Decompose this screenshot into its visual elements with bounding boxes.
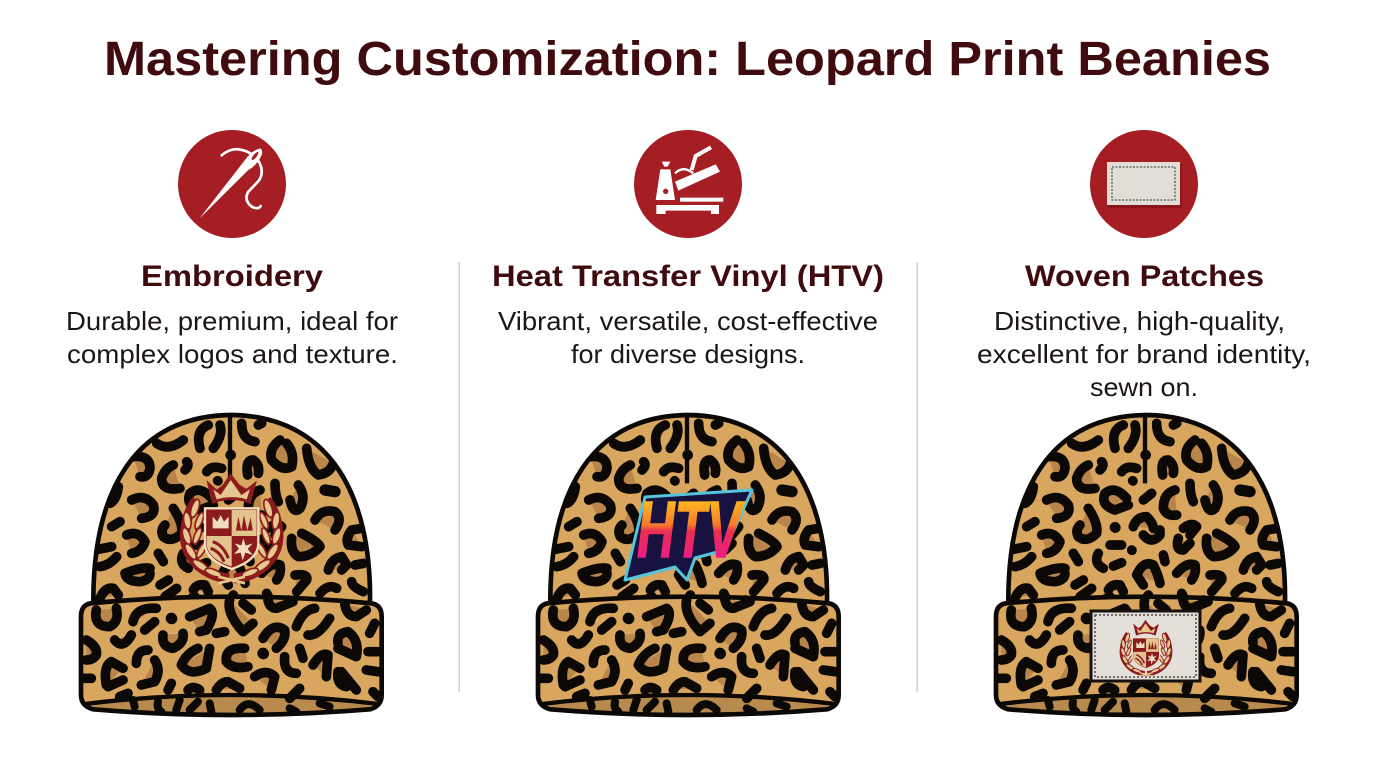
- text: embroidery description: Durable, premium, ideal for: [66, 306, 398, 336]
- text: woven patches description: excellent for brand identity,: [977, 339, 1311, 369]
- icon: needle and thread: [178, 130, 286, 238]
- panel: woven patches: [977, 130, 1311, 715]
- heading: woven patches: Woven Patches: [1025, 260, 1264, 293]
- text: woven patches description: [977, 306, 1311, 402]
- beanie with HTV transfer: [538, 415, 839, 715]
- woven label patch: [1091, 611, 1200, 681]
- panel: embroidery: [66, 130, 398, 715]
- heading: HTV: Heat Transfer Vinyl (HTV): [492, 260, 884, 293]
- text: HTV description: for diverse designs.: [571, 339, 805, 369]
- HTV logo: HTV: [637, 485, 745, 574]
- divider left: [458, 262, 460, 692]
- panel: heat transfer vinyl: [492, 130, 884, 715]
- beanie with woven patch: [996, 415, 1297, 715]
- text: HTV description: [498, 306, 878, 369]
- icon: woven patch: [1090, 130, 1198, 238]
- title: Mastering Customization: Leopard Print Beanies: [104, 33, 1271, 86]
- text: woven patches description: sewn on.: [1090, 372, 1198, 402]
- text: embroidery description: complex logos and texture.: [67, 339, 398, 369]
- text: embroidery description: [66, 306, 398, 369]
- beanie with embroidered crest: [81, 415, 382, 715]
- icon: heat press: [634, 130, 742, 238]
- divider right: [916, 262, 918, 692]
- HTV logo: [625, 485, 752, 580]
- text: woven patches description: Distinctive, high-quality,: [994, 306, 1285, 336]
- text: HTV description: Vibrant, versatile, cost-effective: [498, 306, 878, 336]
- heading: embroidery: Embroidery: [141, 260, 323, 293]
